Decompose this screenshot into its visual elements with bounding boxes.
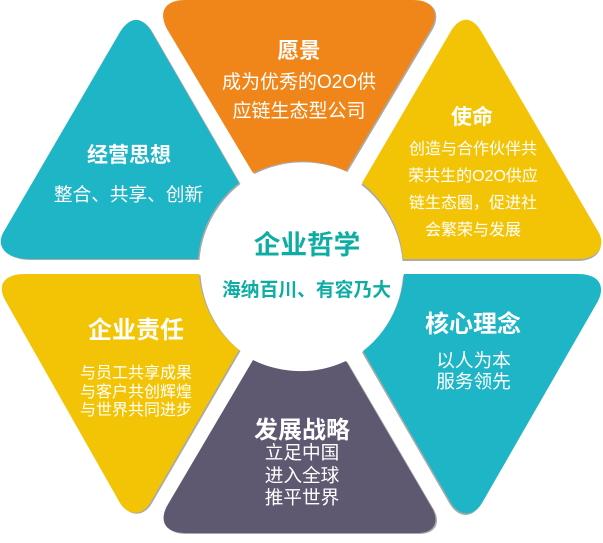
text: corporate responsibility body: 与世界共同进步 [80, 401, 192, 419]
center: corporate philosophy [222, 230, 391, 300]
text: mission body [408, 140, 538, 239]
text: vision body [222, 71, 376, 122]
text: vision body: 成为优秀的O2O供 [222, 71, 376, 93]
text: development strategy body [265, 442, 340, 508]
text: corporate responsibility body: 与员工共享成果 [80, 364, 192, 382]
text: philosophy slogan: 海纳百川、有容乃大 [222, 278, 391, 300]
heading: business thought: 经营思想 [87, 144, 171, 167]
text: vision body: 应链生态型公司 [232, 100, 366, 122]
panel: corporate responsibility [2, 274, 241, 514]
text: development strategy body: 推平世界 [265, 487, 339, 508]
text: core values body: 以人为本 [436, 350, 511, 371]
panel: business thought [1, 20, 241, 260]
heading: development strategy: 发展战略 [254, 417, 350, 444]
text: mission body: 创造与合作伙伴共 [409, 140, 537, 158]
text: development strategy body: 进入全球 [265, 465, 340, 486]
text: corporate responsibility body [80, 364, 192, 419]
text: corporate responsibility body: 与客户共创辉煌 [80, 383, 192, 401]
text: business thought body: 整合、共享、创新 [54, 184, 203, 205]
heading: vision: 愿景 [277, 39, 321, 63]
panel: mission [362, 20, 601, 261]
text: mission body: 会繁荣与发展 [425, 221, 521, 239]
panel: core values [362, 274, 601, 515]
heading: corporate philosophy: 企业哲学 [254, 230, 360, 260]
heading: core values: 核心理念 [425, 310, 521, 338]
panel: vision [163, 0, 436, 174]
text: mission body: 链生态圈，促进社 [409, 194, 537, 212]
heading: mission: 使命 [451, 105, 493, 129]
text: core values body [436, 350, 511, 392]
text: mission body: 荣共生的O2O供应 [408, 166, 538, 185]
heading: corporate responsibility: 企业责任 [88, 317, 184, 344]
text: development strategy body: 立足中国 [265, 442, 339, 463]
panel: development strategy [164, 360, 437, 534]
text: core values body: 服务领先 [436, 371, 511, 392]
